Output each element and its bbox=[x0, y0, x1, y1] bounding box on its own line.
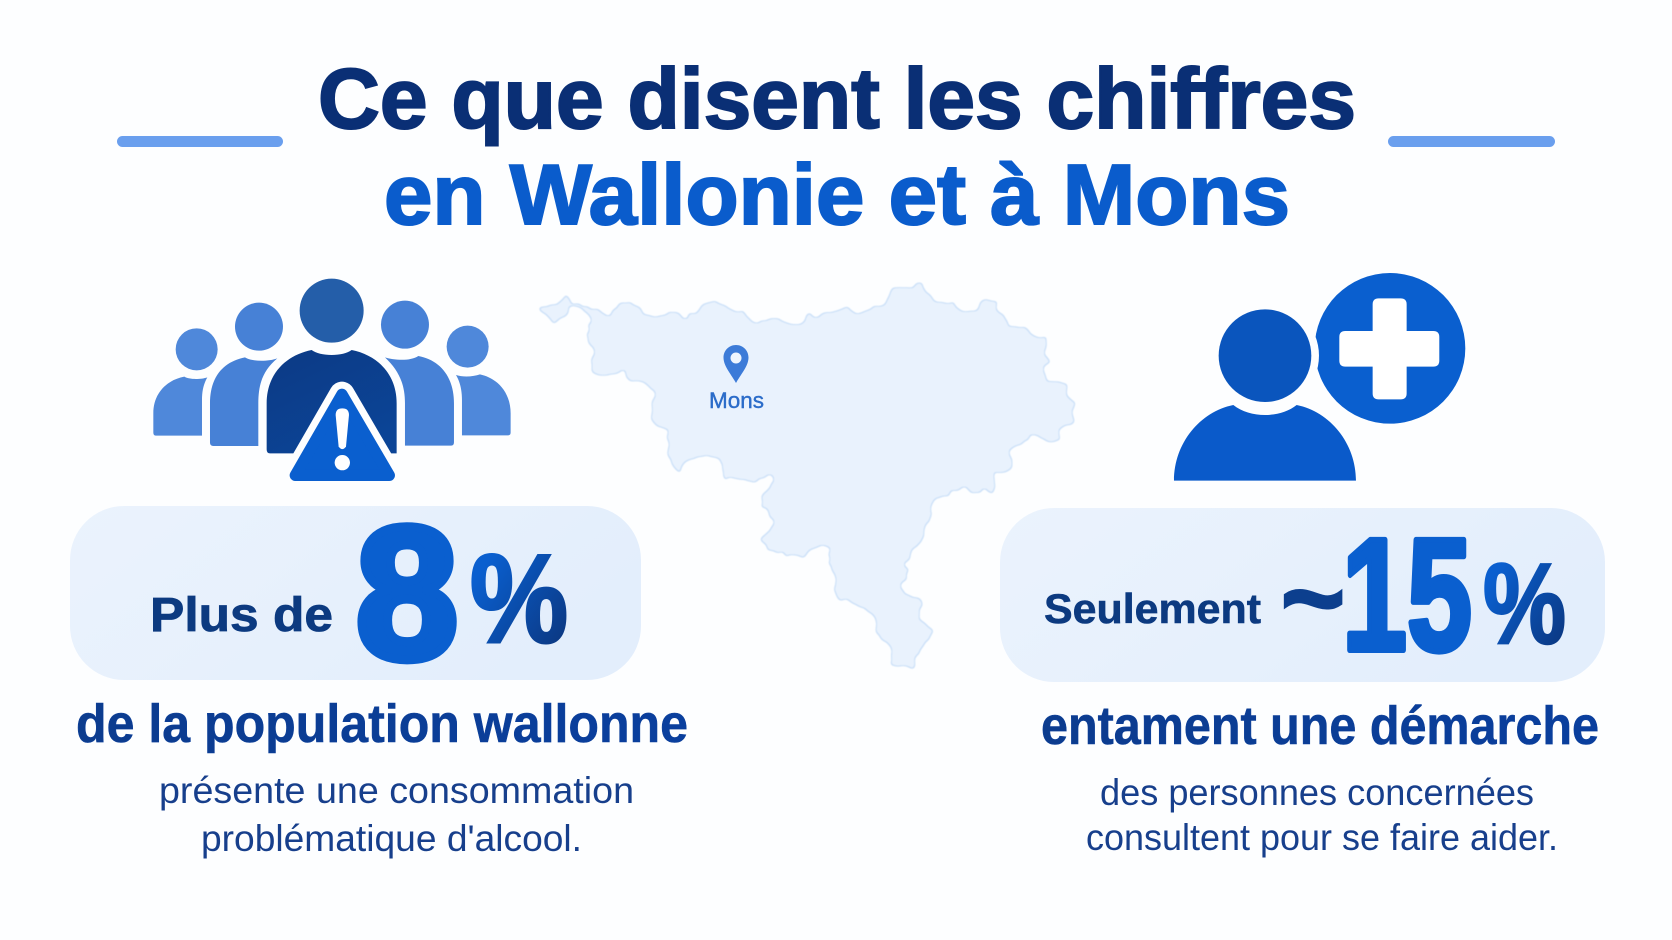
label: Seulement: Seulement bbox=[1044, 585, 1261, 632]
icon: Mons map pin bbox=[724, 345, 748, 383]
heading: entament une démarche: entament une démarche bbox=[1041, 696, 1599, 756]
text: left description bbox=[159, 770, 634, 859]
title accent bar left bbox=[117, 136, 283, 147]
title accent bar right bbox=[1388, 136, 1555, 147]
text: left description: présente une consommation bbox=[159, 770, 634, 811]
icon: group of people with warning bbox=[153, 279, 511, 475]
percent sign: % bbox=[470, 530, 568, 669]
title line 1: Ce que disent les chiffres bbox=[318, 52, 1356, 147]
icon: person with medical cross bbox=[1174, 273, 1465, 481]
tilde: ~ bbox=[1281, 537, 1345, 660]
map label: Mons: Mons bbox=[709, 388, 764, 413]
warning triangle bbox=[295, 394, 389, 475]
central person bbox=[267, 279, 397, 453]
text: left description: problématique d'alcool. bbox=[201, 818, 582, 859]
map of Wallonia bbox=[542, 285, 1074, 668]
text: right description: consultent pour se faire aider. bbox=[1086, 817, 1558, 858]
text: right description bbox=[1086, 772, 1558, 858]
title line 2: en Wallonie et à Mons bbox=[384, 148, 1290, 243]
label: Plus de: Plus de bbox=[150, 589, 333, 642]
panel: 8 percent statistic bbox=[70, 488, 641, 698]
number: 8: 8 bbox=[356, 488, 458, 698]
heading: de la population wallonne: de la population wallonne bbox=[76, 694, 688, 754]
person bbox=[1174, 309, 1356, 481]
outer people bbox=[153, 326, 511, 436]
panel: 15 percent statistic bbox=[1000, 505, 1605, 684]
medical cross badge bbox=[1211, 273, 1465, 424]
inner people bbox=[210, 301, 454, 446]
text: right description: des personnes concernées bbox=[1100, 772, 1534, 813]
title bbox=[318, 52, 1356, 243]
percent sign: % bbox=[1483, 541, 1566, 668]
number: 15: 15 bbox=[1342, 505, 1472, 684]
